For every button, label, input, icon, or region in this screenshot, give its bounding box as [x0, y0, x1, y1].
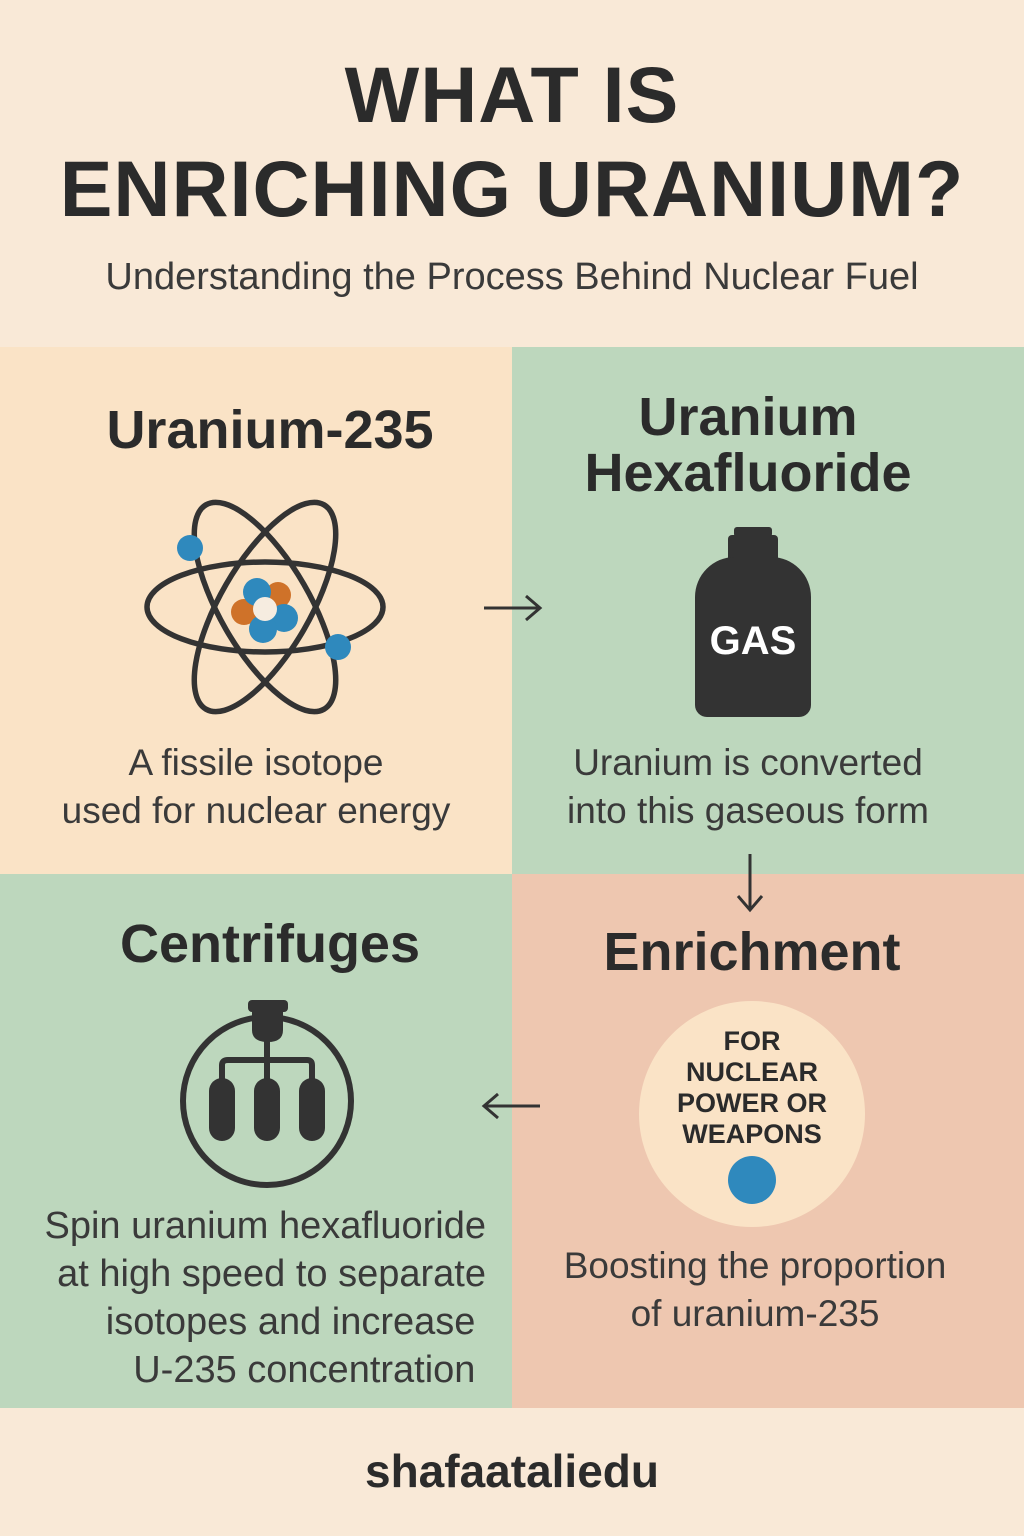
- icon: circle badge: POWER OR: [677, 1088, 827, 1118]
- text: [44, 1205, 486, 1391]
- text: U-235 concentration: [133, 1349, 475, 1391]
- icon: circle badge: [639, 1001, 865, 1227]
- text: at high speed to separate: [57, 1253, 486, 1295]
- panel: uranium hexafluoride: [512, 347, 1024, 874]
- heading: Centrifuges: [120, 914, 420, 974]
- heading: Hexafluoride: [584, 443, 912, 503]
- heading: Uranium-235: Uranium-235: [106, 400, 434, 460]
- text: Uranium is converted: [573, 742, 923, 783]
- text: Boosting the proportion: [564, 1245, 946, 1286]
- title: [60, 50, 964, 233]
- text: of uranium-235: [631, 1293, 879, 1334]
- heading: [584, 387, 912, 503]
- text: fissile isotope: used for nuclear energy: [62, 790, 450, 831]
- panel: uranium-235: [0, 347, 512, 874]
- icon: centrifuge: [180, 1000, 354, 1188]
- footer: shafaataliedu: [365, 1445, 659, 1497]
- text: [564, 1245, 946, 1334]
- panel: centrifuges: [0, 874, 512, 1408]
- panel: enrichment: [512, 874, 1024, 1408]
- icon: atom: [144, 500, 386, 714]
- text: [567, 742, 929, 831]
- title: WHAT IS: [345, 50, 679, 139]
- icon: circle badge: FOR: [724, 1026, 780, 1056]
- text: fissile isotope: A fissile isotope: [128, 742, 384, 783]
- text: into this gaseous form: [567, 790, 929, 831]
- heading: Uranium: [638, 387, 858, 447]
- text: Spin uranium hexafluoride: [44, 1205, 486, 1247]
- subtitle: Understanding the Process Behind Nuclear Fuel: [105, 256, 919, 298]
- icon: circle badge: NUCLEAR: [686, 1057, 818, 1087]
- arrow: right: [484, 595, 542, 621]
- icon: circle badge: WEAPONS: [682, 1119, 822, 1149]
- icon: gas bottle: [695, 527, 811, 717]
- text: fissile isotope: [62, 742, 450, 831]
- arrow: down: [736, 854, 763, 912]
- icon: gas bottle: GAS: [710, 619, 796, 663]
- title: ENRICHING URANIUM?: [60, 144, 964, 233]
- heading: Enrichment: [603, 922, 901, 982]
- arrow: left: [482, 1093, 540, 1119]
- text: isotopes and increase: [106, 1301, 475, 1343]
